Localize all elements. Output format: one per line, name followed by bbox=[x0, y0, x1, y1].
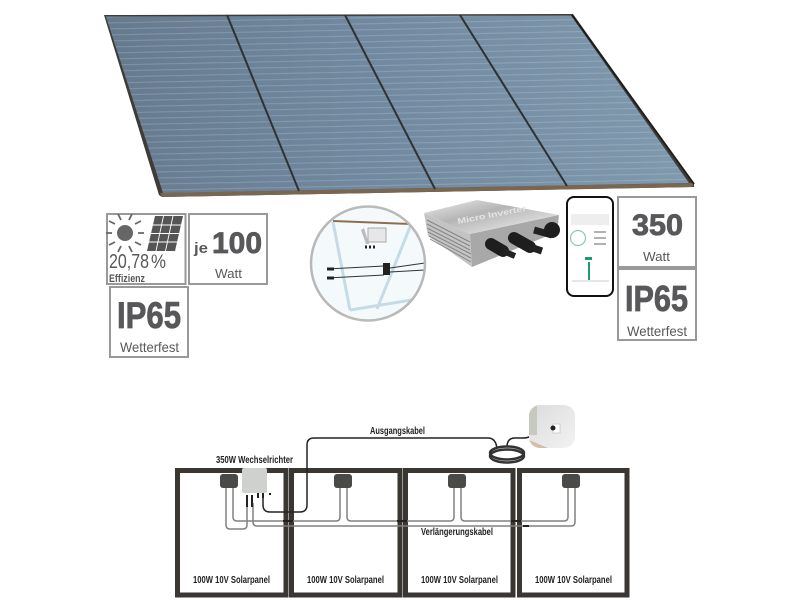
lens ring bbox=[311, 206, 425, 320]
panel divider 3 bbox=[460, 15, 567, 186]
label: panel 2: 100W 10V Solarpanel bbox=[307, 575, 384, 586]
IP65 value: IP65 bbox=[625, 278, 688, 319]
solar panel outline 3 bbox=[406, 470, 513, 595]
junction box 4 bbox=[562, 474, 580, 488]
inverter label: Micro Inverter bbox=[457, 204, 527, 226]
junction box 2 bbox=[334, 474, 352, 488]
bottom brown edge bbox=[160, 183, 694, 197]
app ring gauge bbox=[570, 230, 586, 246]
solar panel outline 2 bbox=[292, 470, 400, 595]
badge: 100 watt each bbox=[189, 214, 267, 284]
solar panel array photo bbox=[104, 14, 694, 197]
value 100: 100 bbox=[212, 227, 262, 260]
panel divider 1 bbox=[227, 15, 299, 191]
smartphone app bbox=[567, 197, 613, 296]
cell busbar stripes bbox=[106, 16, 689, 193]
watt label: Watt bbox=[643, 249, 670, 264]
app chart bar bbox=[585, 257, 592, 280]
badge: efficiency bbox=[106, 214, 186, 285]
weatherproof label: Wetterfest bbox=[120, 339, 179, 355]
connector 1 bbox=[491, 244, 515, 256]
label: panel 3: 100W 10V Solarpanel bbox=[421, 575, 498, 586]
label: panel 4: 100W 10V Solarpanel bbox=[535, 575, 612, 586]
label: inverter: 350W Wechselrichter bbox=[216, 455, 293, 466]
inverter front side bbox=[470, 215, 559, 267]
right frame edge bbox=[572, 15, 694, 184]
panel divider 2 bbox=[345, 15, 435, 189]
solar panel outline 4 bbox=[520, 470, 627, 595]
value 350: 350 bbox=[632, 209, 683, 242]
efficiency value: 20,78 bbox=[109, 251, 149, 273]
app chart baseline bbox=[572, 280, 609, 282]
wire connectors bbox=[283, 521, 529, 526]
badge: 350 watt bbox=[618, 197, 696, 267]
gray panel wires bbox=[226, 488, 575, 529]
cell surface bbox=[106, 16, 689, 193]
badge: IP65 left bbox=[110, 287, 188, 357]
watt label: Watt bbox=[215, 266, 242, 281]
wall socket picture bbox=[529, 405, 575, 448]
app readout lines bbox=[594, 232, 606, 244]
je label: je bbox=[193, 240, 208, 257]
wiring diagram bbox=[178, 405, 627, 595]
IP65 value: IP65 bbox=[117, 295, 181, 336]
weatherproof label: Wetterfest bbox=[627, 323, 687, 339]
badge: IP65 right bbox=[618, 269, 696, 340]
inverter top bbox=[424, 200, 559, 234]
solar panel outline 1 bbox=[178, 470, 286, 595]
efficiency label: Effizienz bbox=[109, 273, 145, 285]
cable coil bbox=[490, 446, 524, 462]
inverter left finned side bbox=[424, 213, 472, 267]
panel frame bbox=[104, 14, 694, 197]
connector 2 bbox=[514, 238, 542, 251]
percent sign: % bbox=[151, 252, 166, 273]
label: output cable: Ausgangskabel bbox=[370, 426, 425, 437]
app header card bbox=[571, 214, 609, 225]
circular detail view of panel back bbox=[311, 206, 430, 320]
connector 3 bbox=[534, 222, 560, 238]
junction box 1 bbox=[220, 474, 238, 488]
junction box 3 bbox=[448, 474, 466, 488]
label: panel 1: 100W 10V Solarpanel bbox=[193, 575, 270, 586]
inverter bbox=[242, 468, 270, 507]
icon: sun bbox=[106, 214, 144, 252]
micro inverter photo bbox=[424, 200, 560, 267]
label: extension cable: Verlängerungskabel bbox=[421, 527, 493, 538]
icon: solar module bbox=[147, 216, 183, 251]
back frame and cables bbox=[327, 221, 430, 310]
output cable bbox=[263, 424, 542, 512]
